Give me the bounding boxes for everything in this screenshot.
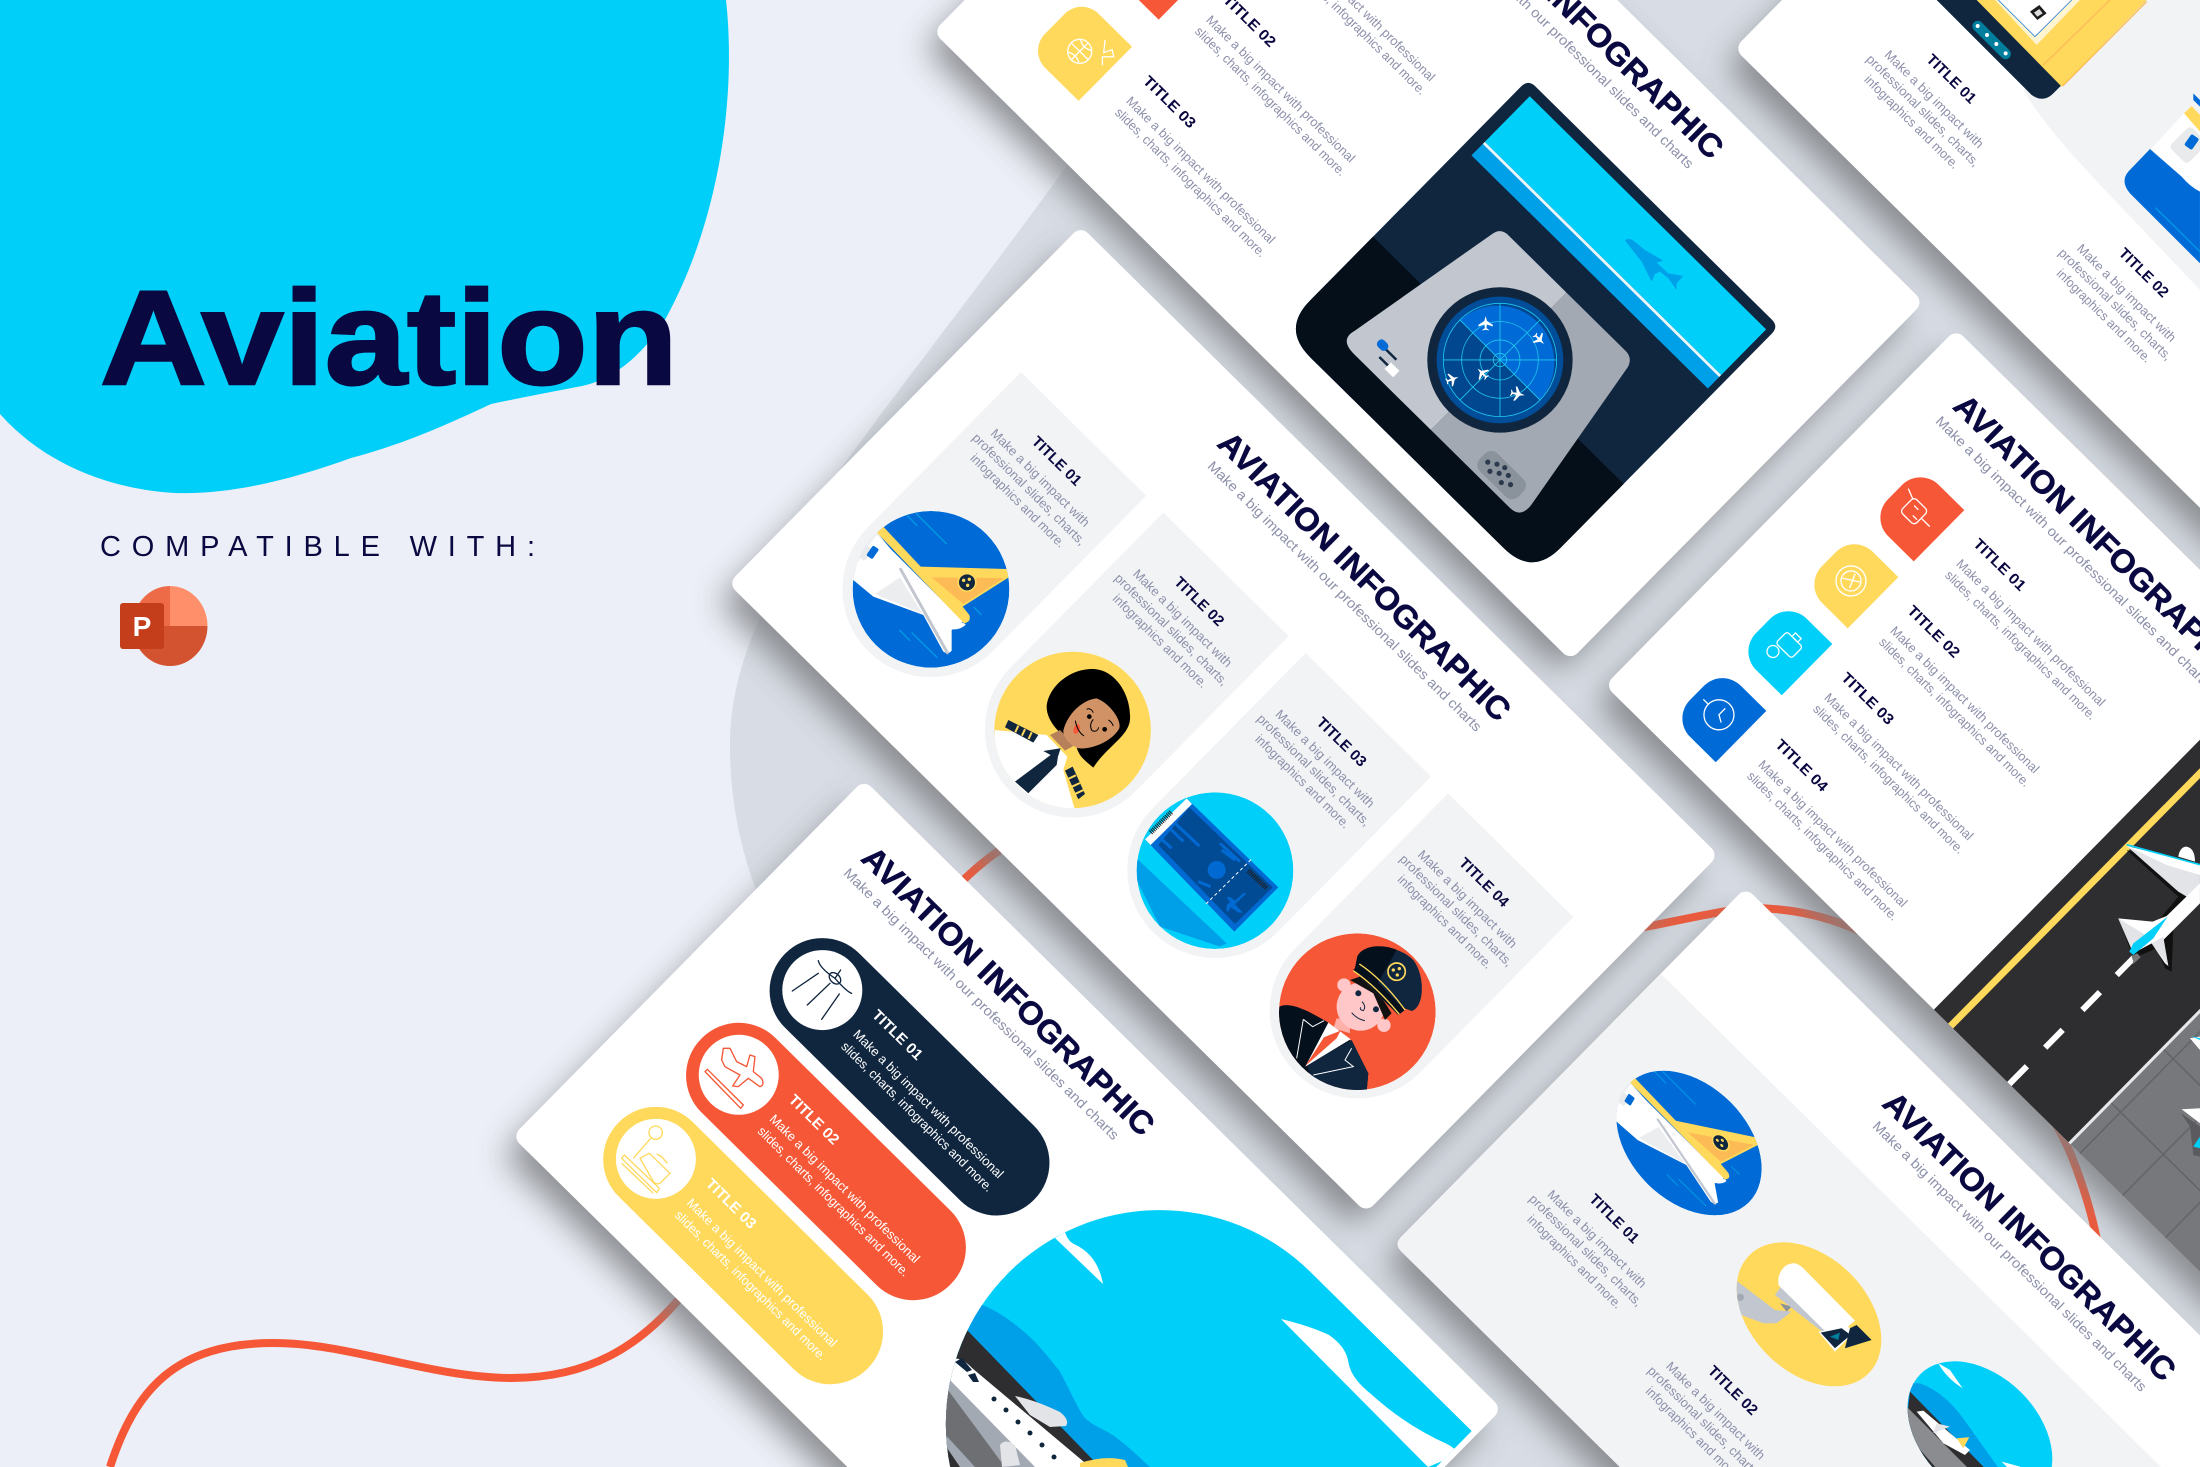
slide subtitle: Make a big impact with our professional slides and charts (1870, 1118, 2150, 1395)
pill 02: slides, charts, infographics and more. (755, 1123, 913, 1279)
item 04: Make a big impact with professional (1755, 757, 1911, 910)
panel: bottom-left slide with pills (512, 780, 1520, 1467)
column 02: infographics and more. (1110, 591, 1211, 691)
item 04: TITLE 04 (1772, 736, 1832, 796)
item 03 text: TITLE 03 (1139, 73, 1199, 132)
item 01 text (1515, 1161, 1676, 1321)
icon: PowerPoint (120, 586, 208, 666)
item 03 text (1111, 73, 1299, 260)
pill 01: TITLE 01 (868, 1007, 926, 1064)
icon: PowerPoint: P (133, 611, 151, 642)
item 02: slides, charts, infographics and more. (1876, 634, 2033, 790)
slide title: AVIATION INFOGRAPHIC (1211, 424, 1518, 728)
panel: right slide with runway (1605, 329, 2200, 1314)
orange curve (110, 827, 2097, 1467)
slide title: AVIATION INFOGRAPHIC (1876, 1084, 2183, 1388)
item 03 text: slides, charts, infographics and more. (1112, 105, 1269, 260)
panel: top slide with radar (933, 0, 1924, 660)
column 04 (1233, 793, 1573, 1135)
pill 02: Make a big impact with professional (767, 1111, 923, 1266)
column 03: professional slides, charts, (1254, 711, 1374, 829)
panel: bottom-right slide (1394, 887, 2200, 1467)
pill 01: Make a big impact with professional (850, 1027, 1007, 1181)
icon: satellite (792, 961, 852, 1019)
illustration: sky and runway (946, 1210, 1472, 1467)
sky plane silhouette (1625, 239, 1683, 290)
pill 03: slides, charts, infographics and more. (672, 1207, 830, 1363)
icon: yellow tab globe (1028, 0, 1132, 101)
cyan blob (0, 0, 729, 493)
slide subtitle: Make a big impact with our professional slides and charts (1933, 413, 2200, 691)
item 01 text: TITLE 01 (1586, 1191, 1642, 1247)
item 03 text: Make a big impact with professional (1123, 93, 1278, 247)
item 02 text: slides, charts, infographics and more. (1192, 24, 1349, 179)
item 01 text: Make a big impact with (1882, 47, 1987, 151)
item 02 text: Make a big impact with (2074, 241, 2179, 345)
panel: centre slide with four columns (728, 226, 1719, 1213)
item 02 (1804, 534, 2068, 795)
pill 02: TITLE 02 (785, 1091, 842, 1148)
item 02 text (1634, 1332, 1794, 1467)
grey backdrop shape (730, 0, 2200, 1467)
column 02: Make a big impact with (1130, 566, 1235, 670)
icon: boarding pass circle (1137, 792, 1293, 949)
item 01 text (1852, 21, 2013, 181)
icon: landing plane (705, 1048, 763, 1108)
illustrations: tablet and plane (1937, 0, 2200, 290)
icon: female pilot circle (993, 652, 1151, 810)
slide title: AVIATION INFOGRAPHIC (855, 839, 1162, 1143)
item 02 text: TITLE 02 (2115, 245, 2172, 301)
item 01 text: infographics and more. (1524, 1212, 1625, 1312)
radar window (1282, 79, 1779, 576)
item 02 text: Make a big impact with professional (1203, 12, 1358, 165)
column 03: TITLE 03 (1313, 714, 1370, 770)
slide shadows (503, 0, 2200, 1467)
column 01 (806, 372, 1146, 714)
item 02 text: professional slides, charts, (2056, 245, 2175, 363)
runway (1934, 654, 2200, 1314)
column 04: professional slides, charts, (1397, 851, 1516, 969)
item 01 text: TITLE 01 (1923, 51, 1980, 107)
item 04 (1672, 667, 1936, 929)
item 01: slides, charts, infographics and more. (1942, 567, 2099, 723)
console (1342, 205, 1566, 430)
item 03: Make a big impact with professional (1821, 690, 1977, 843)
item 01 text: Make a big impact with (1545, 1187, 1650, 1291)
column 04: TITLE 04 (1455, 854, 1513, 911)
icon: runway ellipse (1908, 1361, 2052, 1467)
item 01 text: infographics and more. (1861, 72, 1962, 172)
compatible with label: COMPATIBLE WITH: (100, 531, 535, 563)
pill 01: slides, charts, infographics and more. (838, 1039, 996, 1195)
pill 03 (582, 1085, 905, 1406)
item 01 text: professional slides, charts, (1863, 51, 1983, 170)
column 03: Make a big impact with (1273, 707, 1378, 811)
item 02: Make a big impact with professional (1887, 623, 2043, 776)
slide subtitle: Make a big impact with our professional slides and charts (841, 865, 1122, 1143)
plane on runway (2118, 845, 2200, 1157)
item 02 text: infographics and more. (2054, 266, 2155, 366)
column 02: TITLE 02 (1171, 574, 1227, 630)
icon: plane tail circle (850, 511, 1009, 668)
icon: orange tab (1108, 0, 1212, 20)
column 02 (948, 513, 1289, 854)
column 02: professional slides, charts, (1112, 570, 1231, 689)
item 02 text: TITLE 02 (1704, 1362, 1761, 1419)
pill 01 (748, 917, 1071, 1237)
column 03: infographics and more. (1252, 731, 1353, 831)
column 03 (1091, 653, 1431, 994)
column 04: infographics and more. (1395, 872, 1496, 972)
column 01: infographics and more. (967, 451, 1068, 550)
column 04: Make a big impact with (1415, 847, 1520, 951)
item 02: TITLE 02 (1904, 602, 1963, 662)
radar dial (1427, 287, 1573, 433)
column 01: Make a big impact with (988, 426, 1093, 530)
pill 02 (665, 1001, 987, 1322)
item 01: Make a big impact with professional (1953, 556, 2109, 709)
icon: plane tail ellipse (1616, 1070, 1762, 1216)
item 02 text: Make a big impact with (1663, 1359, 1768, 1463)
panel: top-right slide (1738, 0, 2200, 508)
item 04: slides, charts, infographics and more. (1744, 768, 1901, 924)
content band (1394, 974, 2200, 1467)
pill 03: TITLE 03 (702, 1175, 760, 1232)
item 02 text (2044, 215, 2200, 375)
item 01 text: professional slides, charts, (1526, 1191, 1646, 1309)
item 03: TITLE 03 (1838, 669, 1897, 728)
item 03: slides, charts, infographics and more. (1810, 701, 1967, 857)
icon: male pilot circle (1277, 933, 1436, 1092)
pill 03: Make a big impact with professional (684, 1195, 840, 1350)
column 01: professional slides, charts, (969, 430, 1089, 548)
item 01: TITLE 01 (1970, 535, 2029, 595)
icon: baggage (622, 1126, 670, 1193)
item 03 (1738, 600, 2002, 862)
icon: camera ellipse (1736, 1242, 1882, 1386)
slide subtitle: Make a big impact with our professional slides and charts (1205, 458, 1485, 735)
heading: Aviation (100, 264, 678, 413)
column 01: TITLE 01 (1028, 433, 1085, 490)
item 01 (1870, 467, 2134, 729)
